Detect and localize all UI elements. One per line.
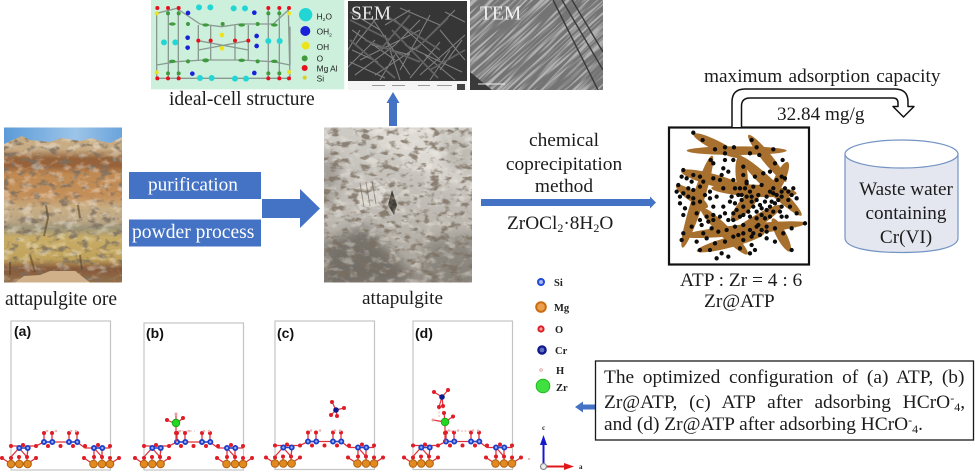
label: ATP to Zr ratio: ATP : Zr = 4 : 6 [680,270,803,291]
callout: optimized configuration caption: , [960,392,965,413]
arrow: maximum adsorption capacity curved arrow [732,89,914,127]
panel (c): ATP after adsorbing HCrO4: (c) [277,325,294,341]
label: reagent formula: ZrOCl [507,213,557,234]
legend: atom types: Zr [556,383,568,394]
label: maximum adsorption capacity: maximum adsorption capacity [704,66,941,87]
panel: ideal-cell structure diagram [151,0,344,89]
legend: atom types: O [555,325,563,336]
panel: ideal-cell structure diagram: O [317,54,324,64]
panel (c): ATP after adsorbing HCrO4 [264,321,385,470]
legend: atom types: Si [554,278,563,289]
legend: atom types: Cr [555,346,568,357]
callout: optimized configuration caption: - [950,391,954,405]
heading: ideal-cell structure: ideal-cell structure [169,89,315,110]
callout: optimized configuration caption: 4 [954,400,960,414]
panel (a): ATP configuration [0,321,121,470]
callout: optimized configuration caption: . [918,414,923,435]
label: waste water containing Cr(VI): containing [866,203,947,224]
box: powder process: powder process [132,222,254,243]
legend: atom types: H [556,366,564,377]
image: SEM micrograph [345,1,467,90]
legend: atom types [536,278,570,394]
label: waste water containing Cr(VI) [859,179,954,248]
callout: optimized configuration caption: The optimized configuration of (a) ATP, (b) [604,367,964,388]
panel: ideal-cell structure diagram: Si [317,73,324,83]
label: Zr@ATP: Zr@ATP [704,291,775,312]
callout: optimized configuration caption [596,361,974,440]
callout: optimized configuration caption: and (d) Zr@ATP after adsorbing HCrO [604,414,908,435]
label: chemical coprecipitation method [506,130,622,197]
label: chemical coprecipitation method: chemical [529,130,599,151]
arrow: process to attapulgite [262,189,320,228]
callout: optimized configuration caption: - [908,413,912,427]
panel (d): Zr@ATP after adsorbing HCrO4: (d) [415,325,433,341]
panel (b): Zr@ATP configuration [133,323,254,470]
image: TEM micrograph [470,0,603,90]
arrow: attapulgite up to micrographs [386,92,400,126]
label: attapulgite: attapulgite [362,288,443,309]
panel: ideal-cell structure diagram: OH [317,42,329,52]
arrow: coprecipitation [481,196,656,208]
value: adsorption capacity: 32.84 mg/g [777,104,865,125]
box: purification [129,172,261,199]
panel: ideal-cell structure diagram: OH [317,27,329,37]
diagram: Zr@ATP composite box [669,128,809,264]
label: chemical coprecipitation method: coprecipitation [506,154,622,175]
label: waste water containing Cr(VI): Waste water [859,179,954,200]
panel: ideal-cell structure diagram: O [325,11,332,21]
icon: crystal axes: a [579,463,583,471]
image: attapulgite powder photo [324,128,472,282]
label: waste water containing Cr(VI): Cr(VI) [880,227,932,248]
box: purification: purification [148,174,238,196]
callout: optimized configuration caption: Zr@ATP, (c) ATP after adsorbing HCrO [604,392,950,413]
legend: atom types: Mg [554,303,570,314]
panel (a): ATP configuration: (a) [14,323,31,339]
label: SEM: SEM [351,4,391,24]
panel: ideal-cell structure diagram: 2 [329,32,332,38]
label: chemical coprecipitation method: method [535,176,593,197]
panel (b): Zr@ATP configuration: (b) [146,325,164,341]
icon: crystal axes [540,424,583,471]
label: reagent formula: 2 [557,221,563,235]
panel: ideal-cell structure diagram: Mg Al [317,64,338,74]
icon: crystal axes: c [542,424,545,432]
icon: waste water cylinder [845,140,958,252]
panel: ideal-cell structure diagram: H [317,11,323,21]
label: TEM: TEM [480,4,521,24]
panel (d): Zr@ATP after adsorbing HCrO4 [402,321,530,470]
label: reagent formula: 2 [593,221,599,235]
label: reagent formula: O [599,213,613,234]
image: attapulgite ore photo [4,128,122,282]
label: attapulgite ore: attapulgite ore [5,289,117,310]
label: reagent formula: ·8H [563,213,593,234]
callout: optimized configuration caption: 4 [912,422,918,436]
panel: ideal-cell structure diagram: 2 [323,17,326,23]
arrow: caption to panels [575,402,596,412]
